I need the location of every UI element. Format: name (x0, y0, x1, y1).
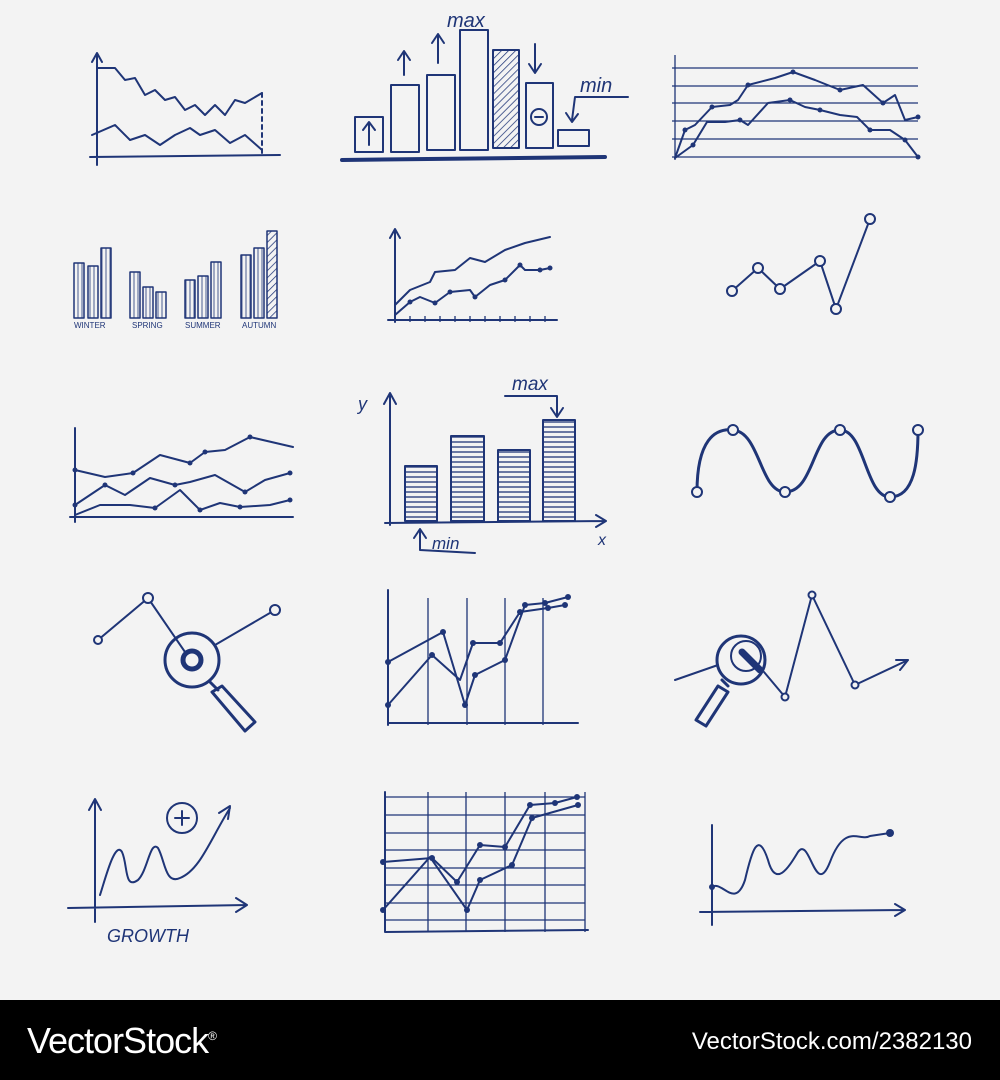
footer url: VectorStock.com/2382130 (692, 1028, 972, 1055)
chart 13: growth (68, 799, 247, 946)
chart 8: striped bars with axes: y (356, 394, 368, 414)
chart 6: circle nodes line (727, 214, 875, 314)
footer bar (0, 1000, 1000, 1080)
chart 4: seasonal bars (74, 231, 277, 330)
chart 4: seasonal bars: SUMMER (185, 321, 221, 330)
chart 5: rising lines (388, 229, 557, 322)
chart 15: wavy curve (700, 825, 905, 925)
chart 8: striped bars with axes: max (512, 374, 549, 395)
chart 8: striped bars with axes: min (432, 534, 459, 553)
chart 4: seasonal bars: SPRING (132, 321, 163, 330)
chart 4: seasonal bars: WINTER (74, 321, 106, 330)
chart 11: grid line chart (385, 590, 578, 725)
footer brand: VectorStock® (27, 1020, 216, 1061)
chart 10: magnifier on line (94, 593, 280, 731)
chart 2: bar chart with max/min: min (580, 75, 612, 97)
chart 8: striped bars with axes: x (597, 532, 607, 549)
chart 13: growth: GROWTH (107, 926, 190, 946)
chart 9: wave with circles (692, 425, 923, 502)
chart 14: grid chart (380, 792, 588, 932)
chart 8: striped bars with axes (356, 374, 607, 553)
chart 3: lined line chart (672, 55, 920, 160)
chart 1: two declining lines (90, 53, 280, 165)
chart 4: seasonal bars: AUTUMN (242, 321, 276, 330)
chart 2: bar chart with max/min: max (447, 10, 486, 32)
chart 2: bar chart with max/min (342, 10, 628, 160)
chart 12: magnifier and peak arrow (675, 592, 908, 726)
chart 7: three lines (70, 428, 293, 522)
